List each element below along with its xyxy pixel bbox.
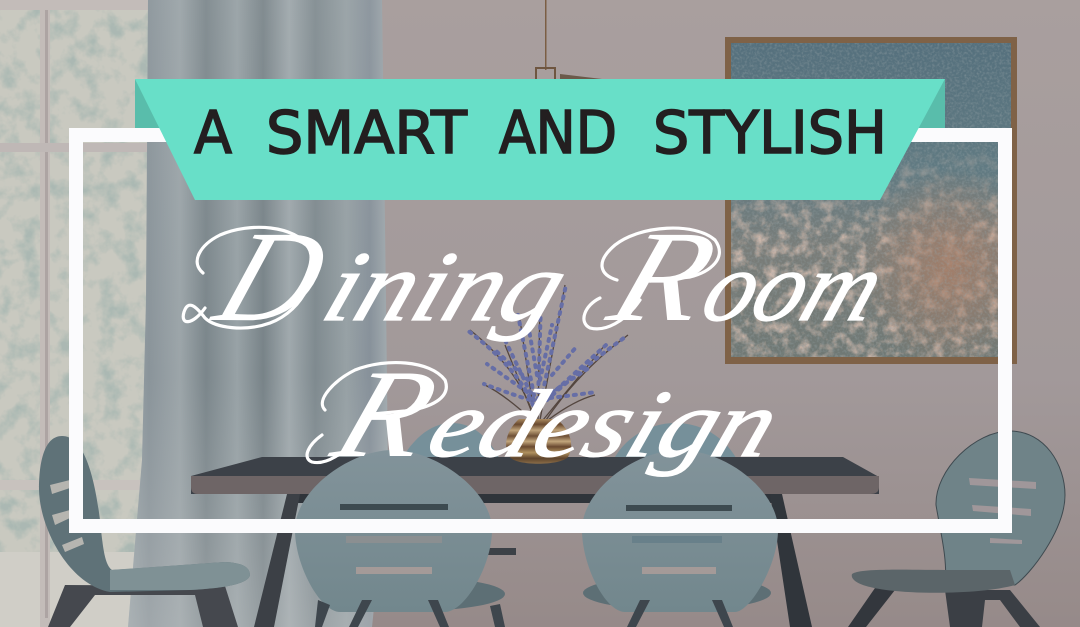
heading: A Smart and Stylish: STYLISH (653, 98, 887, 167)
banner fold: left (135, 79, 162, 128)
chair: centre left (295, 450, 505, 627)
pendant lamp (536, 0, 602, 80)
banner body (135, 79, 945, 200)
heading: A Smart and Stylish: A (194, 98, 232, 167)
heading: A Smart and Stylish: SMART (266, 98, 468, 167)
title line 1: R (592, 205, 734, 349)
title line 1: ining (310, 232, 582, 342)
decorative swashes on the capitals (183, 227, 719, 463)
chair: left side (39, 436, 250, 627)
script title: Dining Room Redesign (183, 205, 909, 484)
chair: centre right (582, 450, 778, 627)
background: framed painting (725, 37, 1017, 364)
back chairs behind the table (396, 423, 742, 555)
title line 2: R (317, 345, 455, 484)
ribbon banner (135, 79, 945, 200)
white overlay frame (69, 128, 1012, 533)
title line 2: edesign (415, 372, 794, 477)
background: window with garden view (0, 0, 150, 627)
title line 1: D (197, 205, 346, 349)
background: curtain (128, 0, 388, 627)
banner fold: right (918, 79, 945, 128)
chair: right side (848, 431, 1065, 627)
dining table (191, 457, 879, 627)
title line 1: oom (689, 232, 899, 342)
vase with lavender branches (467, 285, 628, 464)
heading: A Smart and Stylish: AND (499, 98, 617, 167)
